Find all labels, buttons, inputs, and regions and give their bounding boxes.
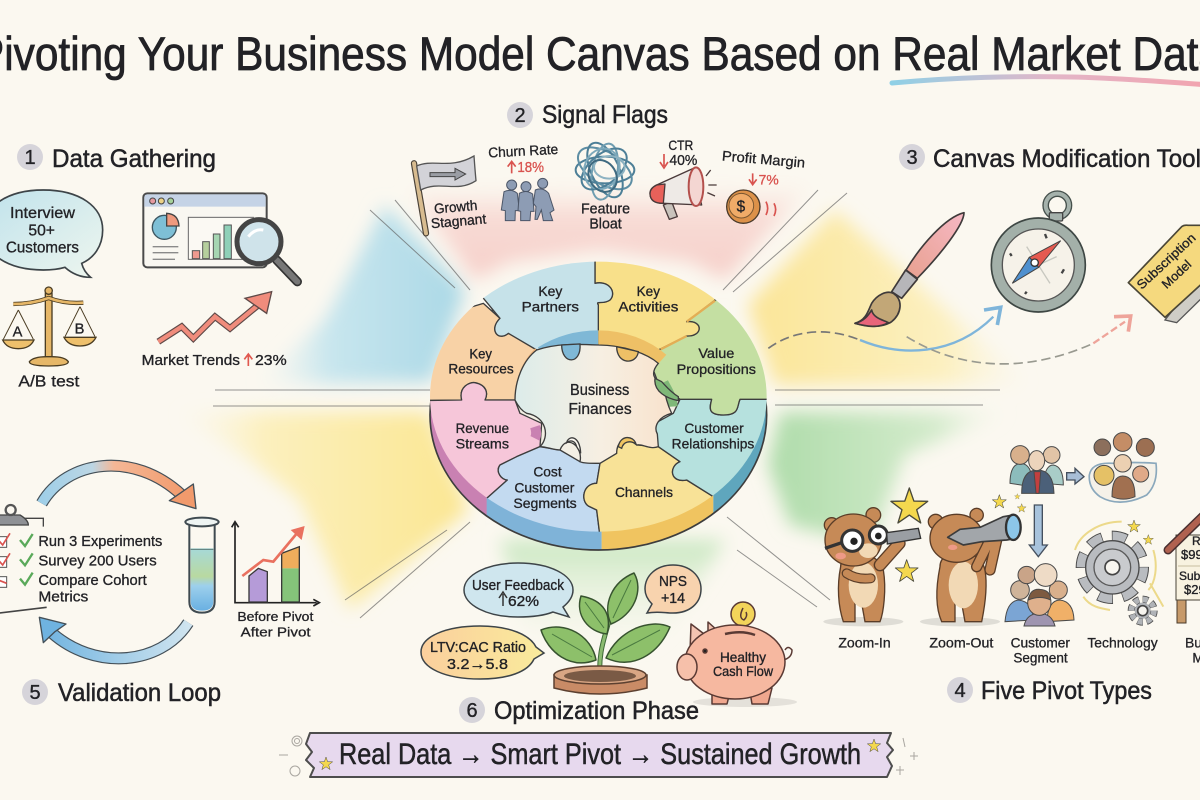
piece labels: Relationships	[672, 436, 754, 452]
checklist: Metrics	[38, 590, 88, 606]
label: A/B test: A/B test	[18, 374, 80, 391]
section heading: 2 Signal Flags: 2	[514, 105, 526, 127]
dashed path to card	[907, 316, 1131, 364]
puzzle base thickness	[429, 310, 768, 551]
checklist: Run 3 Experiments	[38, 534, 162, 550]
label: profit margin: 7%	[759, 172, 779, 188]
piece: key activities	[594, 262, 716, 350]
scale letters	[13, 321, 84, 341]
bubble: NPS: +14	[661, 590, 685, 607]
checklist: Survey 200 Users	[38, 554, 157, 570]
label: churn rate	[488, 141, 559, 176]
label: healthy cash flow: Cash Flow	[713, 663, 774, 679]
icon: test tube	[185, 518, 219, 613]
icon: piggy bank	[677, 602, 797, 707]
piece: key resources	[430, 302, 534, 400]
puzzle pieces	[430, 262, 767, 532]
icon: large gear	[1083, 538, 1142, 597]
panel: signal flags illustrations	[414, 137, 806, 233]
section heading: 6 Optimization Phase: Optimization Phase	[494, 697, 699, 725]
bubble: NPS	[645, 565, 701, 613]
bubble: user feedback: User Feedback	[472, 577, 564, 594]
piece: revenue streams	[430, 382, 542, 498]
section heading: 3 Canvas Modification Tools: 3	[906, 147, 918, 169]
panel: optimization phase illustrations	[421, 563, 797, 707]
pivot type labels: Segment	[1013, 650, 1068, 666]
panel: five pivot types illustrations	[823, 433, 1200, 666]
speech bubble: interview: 50+	[28, 222, 55, 239]
icon: dashboard window	[143, 193, 267, 267]
icon: stagnant flag	[414, 156, 476, 233]
chart: before and after pivot: After Pivot	[241, 625, 311, 640]
arrow: loop top	[42, 466, 196, 509]
bubble: LTV CAC ratio: LTV:CAC Ratio	[430, 639, 526, 656]
label: market trends: Market Trends	[142, 353, 240, 369]
icon: customer crowd	[1005, 564, 1074, 626]
speech bubble: interview	[0, 190, 103, 277]
piece labels: Key	[637, 283, 660, 299]
hole wall knobs	[562, 344, 678, 453]
label: CTR down 40%	[660, 137, 697, 169]
label: growth stagnant: Growth	[433, 197, 478, 217]
piece labels: Cost	[533, 464, 562, 480]
piece: key partners	[482, 262, 614, 350]
bubble: LTV CAC ratio: 3.2→5.8	[447, 656, 508, 673]
piece: cost customer segments	[486, 446, 600, 532]
panel: data gathering illustrations	[0, 190, 297, 391]
icon: three people	[501, 178, 554, 221]
speech bubble: interview: Customers	[6, 240, 79, 257]
dashed path to compass	[768, 307, 1001, 351]
icon: growing plant	[541, 573, 670, 678]
icon: subscription card	[1128, 225, 1200, 323]
piece labels: Propositions	[677, 361, 756, 377]
section heading: 6 Optimization Phase: 6	[466, 700, 478, 722]
label: feature bloat: Feature	[581, 201, 630, 217]
label: profit margin	[721, 147, 806, 188]
key activities lower edge	[661, 301, 715, 349]
bubble: user feedback: 62%	[508, 593, 539, 610]
pivot type labels: Zoom-In	[838, 634, 891, 650]
checklist: Compare Cohort	[38, 573, 147, 589]
piece labels: Activities	[618, 298, 678, 314]
central hub	[515, 344, 672, 463]
label: healthy cash flow	[713, 649, 774, 679]
icon: coin	[727, 190, 776, 223]
piece labels: Revenue	[456, 420, 509, 436]
label: hub: Finances	[568, 401, 632, 418]
icon: zoom-out sparkles	[992, 494, 1026, 512]
icon: A/B balance scale	[3, 287, 96, 366]
label: growth stagnant	[429, 196, 487, 231]
section heading: 4 Five Pivot Types: 4	[954, 680, 966, 702]
label: market trends: 23%	[255, 353, 287, 369]
label: CTR down 40%: 40%	[669, 153, 697, 169]
piece labels: Customer	[684, 420, 744, 436]
icon: rotating sparkles and arrows	[1075, 522, 1163, 610]
panel: canvas modification tools	[768, 194, 1200, 364]
piece: value propositions	[654, 300, 767, 416]
chart: before and after pivot: Before Pivot	[237, 609, 314, 624]
chart: before and after pivot	[232, 522, 319, 640]
panel: validation loop illustrations	[0, 466, 319, 658]
scale letters: A	[13, 325, 23, 341]
icon: pricing sign	[1168, 514, 1200, 623]
label: hub: Business	[570, 382, 630, 399]
icon: compass	[991, 194, 1085, 312]
piece labels: Value	[698, 345, 735, 361]
piece labels: Resources	[448, 361, 514, 377]
icon: tech sparkles	[1128, 520, 1153, 544]
banner: closing message: Real Data → Smart Pivot → Sustained Growth	[339, 738, 861, 771]
icon: coin: $	[737, 198, 746, 215]
icon: magnifying glass	[237, 220, 297, 282]
section heading: 1 Data Gathering: Data Gathering	[52, 145, 216, 173]
icon: subscription card: Subscription	[1134, 231, 1199, 292]
piece labels: Channels	[615, 484, 673, 500]
icon: clipboard	[0, 505, 47, 613]
icon: business team	[1010, 446, 1063, 493]
piece labels: Customer	[514, 480, 575, 496]
icon: megaphone	[650, 167, 717, 219]
section heading: 5 Validation Loop: 5	[29, 682, 41, 704]
label: growth stagnant: Stagnant	[430, 210, 487, 231]
piece labels: Streams	[456, 436, 509, 452]
label: feature bloat	[581, 201, 630, 233]
central puzzle: business model canvas	[429, 262, 768, 551]
label: healthy cash flow: Healthy	[720, 649, 766, 665]
watercolor wedge backdrop	[175, 186, 1030, 650]
icon: zoom-out bear	[920, 508, 1021, 626]
icon: arrow down	[1029, 505, 1047, 557]
icon: subscription card: Model	[1159, 257, 1194, 292]
piece labels: Key	[538, 283, 562, 299]
piece: channels	[583, 442, 713, 532]
label: churn rate: Churn Rate	[488, 141, 559, 160]
scale letters: B	[75, 321, 84, 337]
icon: plant pot	[554, 666, 647, 694]
section heading: 4 Five Pivot Types: Five Pivot Types	[981, 677, 1152, 705]
icon: zoom-in stars	[891, 488, 928, 581]
icon: zoom-in bear	[823, 508, 921, 626]
icon: trend arrow	[158, 292, 272, 342]
piece labels: Partners	[522, 298, 579, 314]
section heading: 2 Signal Flags: Signal Flags	[542, 101, 668, 129]
label: CTR down 40%: CTR	[668, 137, 693, 153]
bubble: LTV CAC ratio	[421, 626, 544, 679]
speech bubble: interview: Interview	[10, 205, 76, 222]
label: profit margin: Profit Margin	[721, 147, 806, 171]
icon: small gear	[1131, 599, 1154, 622]
title underline	[892, 77, 1200, 85]
label: feature bloat: Bloat	[589, 217, 622, 233]
icon: customer circle	[1089, 433, 1156, 502]
label: churn rate: 18%	[517, 160, 544, 176]
pivot type labels: Technology	[1087, 634, 1158, 650]
label: hub	[568, 382, 632, 418]
bubble: user feedback	[464, 563, 573, 617]
icon: arrow right	[1067, 468, 1084, 484]
checklist	[20, 534, 162, 606]
arrow: loop bottom	[39, 617, 188, 658]
pivot type labels: Zoom-Out	[929, 634, 993, 650]
puzzle hole walls	[527, 337, 671, 438]
piece labels: Segments	[513, 495, 577, 511]
section heading: 5 Validation Loop: Validation Loop	[58, 679, 221, 707]
piece: customer relationships	[656, 398, 767, 496]
piece labels	[448, 283, 756, 511]
pivot type labels: Customer	[1011, 634, 1070, 650]
icon: paintbrush	[855, 213, 964, 326]
banner decorations	[279, 736, 918, 776]
piece labels: Key	[469, 345, 492, 361]
label: market trends	[142, 353, 287, 369]
pivot type labels	[838, 634, 1200, 666]
bubble: NPS: NPS	[659, 573, 687, 590]
banner: closing message	[306, 733, 893, 777]
icon: tangled yarn	[571, 137, 639, 203]
section heading: 1 Data Gathering: 1	[24, 147, 36, 169]
